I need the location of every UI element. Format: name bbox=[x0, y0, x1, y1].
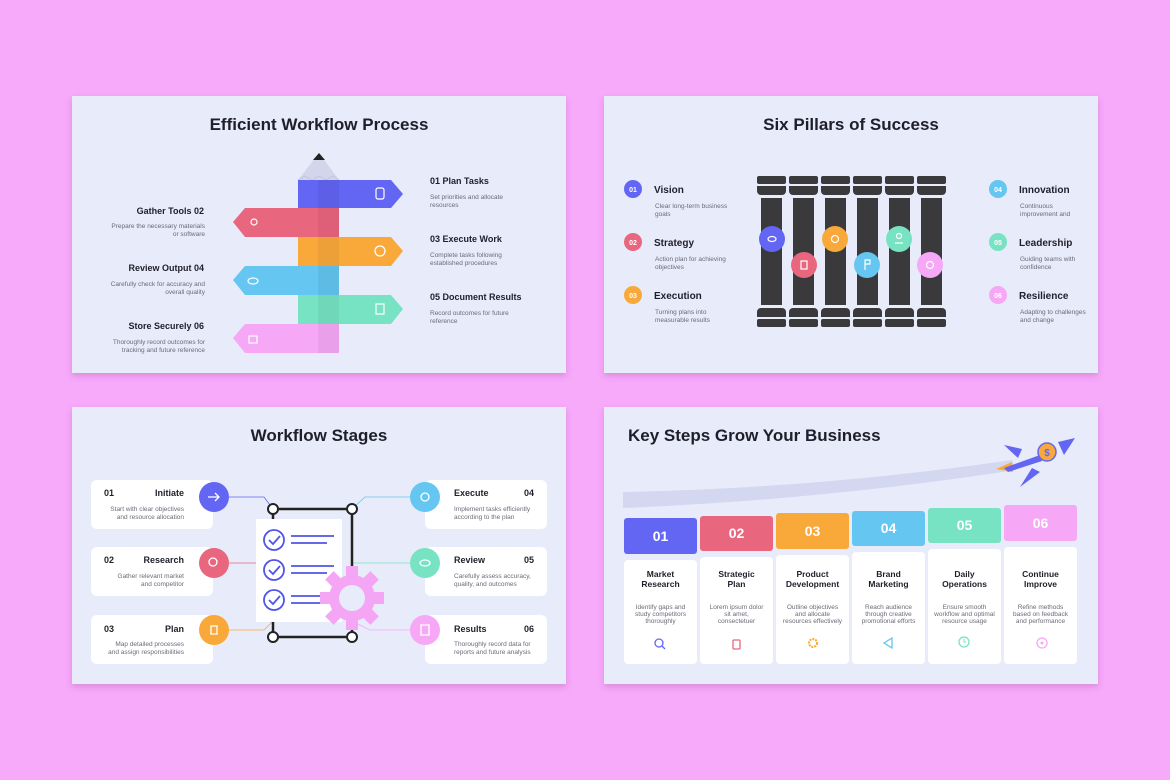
left items: Vision bbox=[654, 185, 684, 196]
step 06: Refine methods bbox=[1018, 604, 1064, 611]
card 06 bbox=[410, 615, 547, 664]
step 06: based on feedback bbox=[1013, 611, 1069, 618]
text 06: Store Securely 06 bbox=[128, 321, 204, 331]
left items: 03 bbox=[629, 293, 637, 300]
right items: 04 bbox=[994, 187, 1002, 194]
step 05: 05 bbox=[957, 517, 972, 533]
arrow 02 bbox=[233, 208, 339, 237]
step 06 bbox=[1004, 505, 1077, 664]
panel: efficient workflow process bbox=[72, 96, 566, 373]
text 01 bbox=[430, 176, 503, 209]
panel: workflow stages bbox=[72, 407, 566, 684]
step 03: and allocate bbox=[795, 611, 830, 618]
step 05: Operations bbox=[942, 579, 987, 589]
step 03: Development bbox=[786, 579, 839, 589]
card 01: Start with clear objectives bbox=[110, 506, 185, 513]
step 01: thoroughly bbox=[645, 618, 676, 625]
step 06: and performance bbox=[1016, 618, 1065, 625]
card 01: Initiate bbox=[155, 488, 184, 498]
right items: Adapting to challenges bbox=[1020, 309, 1087, 316]
card 01: and resource allocation bbox=[117, 514, 184, 521]
card 04: Execute bbox=[454, 488, 489, 498]
step 01: study competitors bbox=[635, 611, 687, 618]
text 03: 03 Execute Work bbox=[430, 234, 503, 244]
left items: goals bbox=[655, 211, 671, 218]
left items: Action plan for achieving bbox=[655, 256, 726, 263]
text 01: resources bbox=[430, 202, 459, 209]
arrow 05 bbox=[298, 295, 403, 324]
card 06: Thoroughly record data for bbox=[454, 641, 531, 648]
arrow 03 bbox=[298, 237, 403, 266]
step 06: 06 bbox=[1033, 515, 1048, 531]
arrow 04 bbox=[233, 266, 339, 295]
text 06: Thoroughly record outcomes for bbox=[113, 339, 206, 346]
right items: Innovation bbox=[1019, 185, 1070, 196]
card 02 bbox=[91, 547, 229, 596]
text 02: Prepare the necessary materials bbox=[111, 223, 206, 230]
right items: Resilience bbox=[1019, 291, 1069, 302]
icon: rocket bbox=[996, 438, 1075, 487]
right items: Guiding teams with bbox=[1020, 256, 1076, 263]
card 06: reports and future analysis bbox=[454, 649, 531, 656]
pillars bbox=[757, 176, 946, 327]
right items: 06 bbox=[994, 293, 1002, 300]
gear bbox=[320, 566, 384, 630]
step 04: promotional efforts bbox=[862, 618, 916, 625]
step 02: Plan bbox=[728, 579, 745, 589]
card 01 bbox=[91, 480, 229, 529]
card 02: Research bbox=[143, 555, 184, 565]
step 02: Strategic bbox=[718, 569, 755, 579]
heading: Workflow Stages: Workflow Stages bbox=[251, 426, 387, 445]
arrow 01 bbox=[298, 180, 403, 208]
card 02: Gather relevant market bbox=[118, 573, 184, 580]
card 05: Review bbox=[454, 555, 486, 565]
right items: Leadership bbox=[1019, 238, 1072, 249]
heading: Six Pillars of Success: Six Pillars of Success bbox=[763, 115, 939, 134]
card 02: 02 bbox=[104, 555, 114, 565]
pillar icons bbox=[759, 226, 943, 278]
card 06: 06 bbox=[524, 624, 534, 634]
panel: key steps grow your business bbox=[604, 407, 1098, 684]
step 05 bbox=[928, 508, 1001, 664]
step 03: Outline objectives bbox=[787, 604, 839, 611]
card 04 bbox=[410, 480, 547, 529]
step 04: Reach audience bbox=[865, 604, 912, 611]
step 02: sit amet, bbox=[724, 611, 749, 618]
card 03: and assign responsibilities bbox=[108, 649, 185, 656]
step 01: Market bbox=[647, 569, 674, 579]
left items: 01 bbox=[629, 187, 637, 194]
text 04: Review Output 04 bbox=[128, 263, 204, 273]
arrow 06 bbox=[233, 324, 339, 353]
card 03: Map detailed processes bbox=[115, 641, 185, 648]
step 01: Research bbox=[641, 579, 680, 589]
step 01: 01 bbox=[653, 528, 668, 544]
right items: Continuous bbox=[1020, 203, 1054, 210]
icon: rocket: $ bbox=[1044, 448, 1050, 459]
text 06: tracking and future reference bbox=[122, 347, 205, 354]
left items: objectives bbox=[655, 264, 685, 271]
left items: Clear long-term business bbox=[655, 203, 728, 210]
text 01: Set priorities and allocate bbox=[430, 194, 503, 201]
card 05: Carefully assess accuracy, bbox=[454, 573, 531, 580]
right items: confidence bbox=[1020, 264, 1052, 271]
text 02: Gather Tools 02 bbox=[137, 206, 204, 216]
connectors bbox=[229, 497, 410, 630]
step 06: Continue bbox=[1022, 569, 1059, 579]
step 05: workflow and optimal bbox=[933, 611, 995, 618]
step 05: Ensure smooth bbox=[943, 604, 987, 611]
right items: 05 bbox=[994, 240, 1002, 247]
panel: six pillars of success bbox=[604, 96, 1098, 373]
step 01: Identify gaps and bbox=[636, 604, 686, 611]
text 02: or software bbox=[173, 231, 205, 238]
step 03: resources effectively bbox=[783, 618, 843, 625]
heading: Key Steps Grow Your Business bbox=[628, 426, 881, 445]
right items bbox=[989, 180, 1087, 324]
left items: Turning plans into bbox=[655, 309, 707, 316]
step 02: Lorem ipsum dolor bbox=[710, 604, 764, 611]
pencil tip bbox=[298, 153, 339, 180]
text 03 bbox=[430, 234, 503, 267]
text 04: Carefully check for accuracy and bbox=[111, 281, 205, 288]
text 05: reference bbox=[430, 318, 458, 325]
card 04: according to the plan bbox=[454, 514, 515, 521]
left items: 02 bbox=[629, 240, 637, 247]
left items bbox=[624, 180, 728, 324]
text 03: established procedures bbox=[430, 260, 498, 267]
checklist frame bbox=[256, 504, 357, 642]
step 06: Improve bbox=[1024, 579, 1057, 589]
card 04: 04 bbox=[524, 488, 534, 498]
step 05: Daily bbox=[954, 569, 975, 579]
text 05: Record outcomes for future bbox=[430, 310, 509, 317]
card 05: quality, and outcomes bbox=[454, 581, 517, 588]
card 01: 01 bbox=[104, 488, 114, 498]
text 06 bbox=[113, 321, 206, 354]
growth trail bbox=[623, 460, 1016, 508]
step 01 bbox=[624, 518, 697, 664]
step 04: Brand bbox=[876, 569, 901, 579]
step 02: 02 bbox=[729, 525, 744, 541]
text 05 bbox=[430, 292, 522, 325]
card 03: 03 bbox=[104, 624, 114, 634]
text 03: Complete tasks following bbox=[430, 252, 502, 259]
right items: and change bbox=[1020, 317, 1054, 324]
step 03 bbox=[776, 513, 849, 664]
left items: measurable results bbox=[655, 317, 711, 324]
step 02 bbox=[700, 516, 773, 664]
step 04: 04 bbox=[881, 520, 896, 536]
card 06: Results bbox=[454, 624, 487, 634]
step 03: Product bbox=[796, 569, 829, 579]
step 04 bbox=[852, 511, 925, 664]
text 04: overall quality bbox=[165, 289, 206, 296]
card 03: Plan bbox=[165, 624, 184, 634]
text 04 bbox=[111, 263, 206, 296]
step 04: Marketing bbox=[868, 579, 909, 589]
step 05: resource usage bbox=[942, 618, 987, 625]
text 01: 01 Plan Tasks bbox=[430, 176, 489, 186]
step 04: through creative bbox=[865, 611, 912, 618]
left items: Execution bbox=[654, 291, 702, 302]
heading: Efficient Workflow Process: Efficient Workflow Process bbox=[210, 115, 428, 134]
card 05 bbox=[410, 547, 547, 596]
card 02: and competitor bbox=[141, 581, 185, 588]
step 02: consectetuer bbox=[718, 618, 756, 625]
text 02 bbox=[111, 206, 206, 238]
card 03 bbox=[91, 615, 229, 664]
text 05: 05 Document Results bbox=[430, 292, 522, 302]
card 05: 05 bbox=[524, 555, 534, 565]
step 03: 03 bbox=[805, 523, 820, 539]
left items: Strategy bbox=[654, 238, 694, 249]
card 04: Implement tasks efficiently bbox=[454, 506, 531, 513]
right items: improvement and bbox=[1020, 211, 1071, 218]
